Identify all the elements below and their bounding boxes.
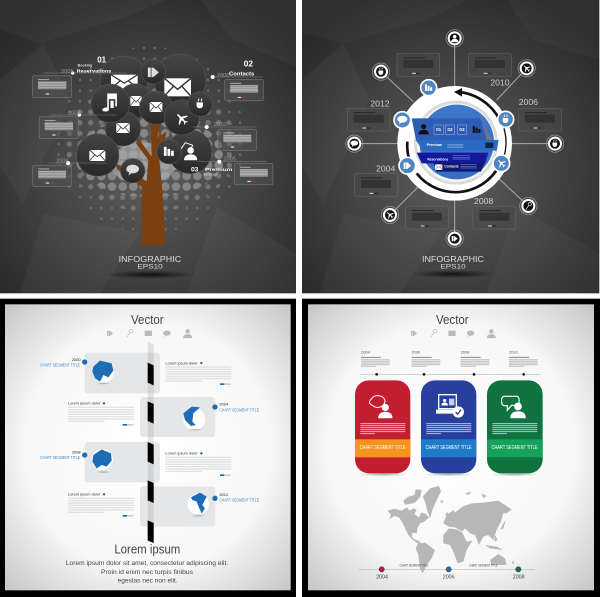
- top timeline text: 2006: [411, 350, 421, 355]
- text block 1: Lorem ipsum dolor: [165, 361, 198, 365]
- card: blue: CHART SEGMENT TITLE: [426, 445, 472, 451]
- bottom timeline: CHART SEGMENT TITLE: [400, 564, 429, 568]
- connector lines and year labels: 2000: [217, 73, 230, 79]
- text block 2: Lorem ipsum dolor: [68, 402, 101, 406]
- text block 4: [68, 493, 134, 517]
- year labels: 2004: [376, 163, 395, 173]
- tree trunk: [115, 124, 167, 245]
- year and title labels: 2004: [219, 401, 229, 406]
- year labels: 2012: [370, 99, 390, 109]
- cards: [85, 353, 215, 527]
- year and title labels: CHART SEGMENT TITLE: [40, 455, 80, 461]
- connector lines and year labels: 2008: [56, 159, 69, 165]
- blue band: icons and numbers: 01: [436, 127, 442, 132]
- panel: rounded cards and map: [302, 299, 600, 597]
- ground shadow: [411, 270, 495, 278]
- text block 1: [165, 361, 231, 385]
- footer heading: Lorem ipsum: [114, 543, 180, 557]
- year labels: [370, 77, 538, 206]
- label: 02 contacts: 02: [244, 58, 253, 68]
- globe 2012: [188, 493, 209, 517]
- card: red: CHART SEGMENT TITLE: [360, 445, 406, 451]
- node icons on ring: [394, 80, 514, 174]
- panel background: [302, 0, 599, 293]
- year and title labels: 2012: [219, 492, 229, 497]
- ribbon: [148, 342, 154, 543]
- blue band: icons and numbers: 03: [459, 127, 465, 132]
- footer title: [422, 255, 484, 271]
- card: blue: [421, 380, 476, 473]
- panel: vertical timeline: [0, 299, 296, 597]
- outer icons: [346, 30, 564, 247]
- icon row: [107, 329, 192, 338]
- frame: [302, 299, 600, 597]
- panel: tree infographic: [0, 0, 296, 293]
- label: 03 premium: [191, 167, 233, 176]
- bottom timeline: CHART SEGMENT TITLE: [469, 564, 498, 568]
- tree circles with icons: [76, 54, 212, 183]
- year and title labels: CHART SEGMENT TITLE: [219, 407, 259, 413]
- text block 3: Lorem ipsum dolor: [165, 452, 198, 456]
- halftone dots: [55, 47, 245, 233]
- footer title: INFOGRAPHIC: [119, 255, 182, 264]
- footer text: [66, 560, 228, 585]
- label: 02 contacts: Contacts: [229, 72, 254, 78]
- icon row: [411, 329, 496, 338]
- label: 01 reservations: [77, 56, 112, 74]
- footer title: INFOGRAPHIC: [422, 255, 484, 264]
- background facets: [0, 0, 296, 293]
- heading: Vector: Vector: [436, 313, 469, 327]
- card: green: [487, 380, 543, 473]
- frame: [0, 299, 296, 597]
- footer title: EPS10: [137, 265, 164, 271]
- footer text: Proin id enim nec turpis finibus: [101, 569, 194, 576]
- ground shadow: [105, 270, 195, 279]
- globe 2004: [183, 407, 205, 431]
- connector lines and year labels: 2005: [223, 157, 236, 163]
- ring and blue core: [397, 86, 512, 201]
- spokes: [354, 38, 555, 239]
- inner background: [308, 304, 594, 590]
- bottom timeline: 2006: [443, 575, 455, 581]
- label: 03 premium: Premium: [205, 167, 233, 173]
- footer text: egestas nec non elit.: [118, 578, 178, 585]
- year and title labels: 2008: [72, 449, 81, 454]
- grey wedge: [480, 117, 492, 140]
- year labels: 2008: [474, 196, 493, 206]
- connector lines and year labels: [43, 69, 267, 165]
- year and title labels: CHART SEGMENT TITLE: [219, 498, 259, 504]
- blue band: premium: Premium: [427, 143, 443, 147]
- bottom timeline: [358, 564, 534, 581]
- bottom timeline: 2008: [513, 575, 525, 581]
- connector lines and year labels: 2005: [61, 69, 74, 75]
- globe 2008: [92, 449, 113, 473]
- year and title labels: 2000: [72, 357, 81, 362]
- label: 03 premium: 03: [191, 167, 199, 174]
- connector lines and year labels: 2008: [68, 110, 81, 116]
- text block 4: Lorem ipsum dolor: [68, 493, 101, 497]
- year and title labels: [40, 357, 259, 504]
- panel: circular infographic: [302, 0, 599, 293]
- blue band: reservations: Reservations: [427, 157, 448, 161]
- text block 2: [68, 402, 134, 426]
- label: 02 contacts: [229, 58, 254, 78]
- card: green: CHART SEGMENT TITLE: [492, 445, 538, 451]
- text boxes: [347, 54, 561, 229]
- footer text: Lorem ipsum dolor sit amet, consectetur adipiscing elit.: [66, 560, 228, 567]
- blue band: contacts: Contacts: [444, 165, 459, 169]
- year labels: 2010: [490, 77, 510, 87]
- top timeline text: 2010: [509, 350, 519, 355]
- card: red: [355, 380, 410, 473]
- top timeline: [360, 373, 540, 376]
- card shadows: [358, 472, 540, 476]
- top timeline text: 2004: [361, 350, 371, 355]
- footer title: EPS10: [440, 265, 467, 271]
- label: 01 reservations: Booking: [78, 63, 92, 67]
- top timeline text: 2008: [461, 350, 470, 355]
- heading: Vector: Vector: [131, 313, 164, 327]
- bottom timeline: 2004: [376, 575, 388, 581]
- top timeline text: [361, 350, 538, 366]
- globe 2000: [92, 361, 114, 385]
- panel background: [0, 0, 296, 293]
- year labels: 2006: [519, 97, 538, 107]
- background facets: [302, 0, 599, 293]
- year and title labels: CHART SEGMENT TITLE: [40, 363, 80, 369]
- blue band: icons and numbers: [412, 118, 487, 140]
- inner background: [5, 304, 291, 590]
- black arrows on ring: [407, 88, 506, 192]
- text boxes: [32, 76, 273, 187]
- world map: [388, 486, 514, 573]
- label: 03 premium: Services: [203, 172, 217, 176]
- text block 3: [165, 452, 231, 476]
- label: 01 reservations: 01: [97, 56, 107, 65]
- connector lines and year labels: 2010: [214, 122, 227, 128]
- label: 01 reservations: Reservations: [77, 68, 112, 74]
- blue band: icons and numbers: 02: [447, 127, 453, 132]
- footer title: [119, 255, 182, 271]
